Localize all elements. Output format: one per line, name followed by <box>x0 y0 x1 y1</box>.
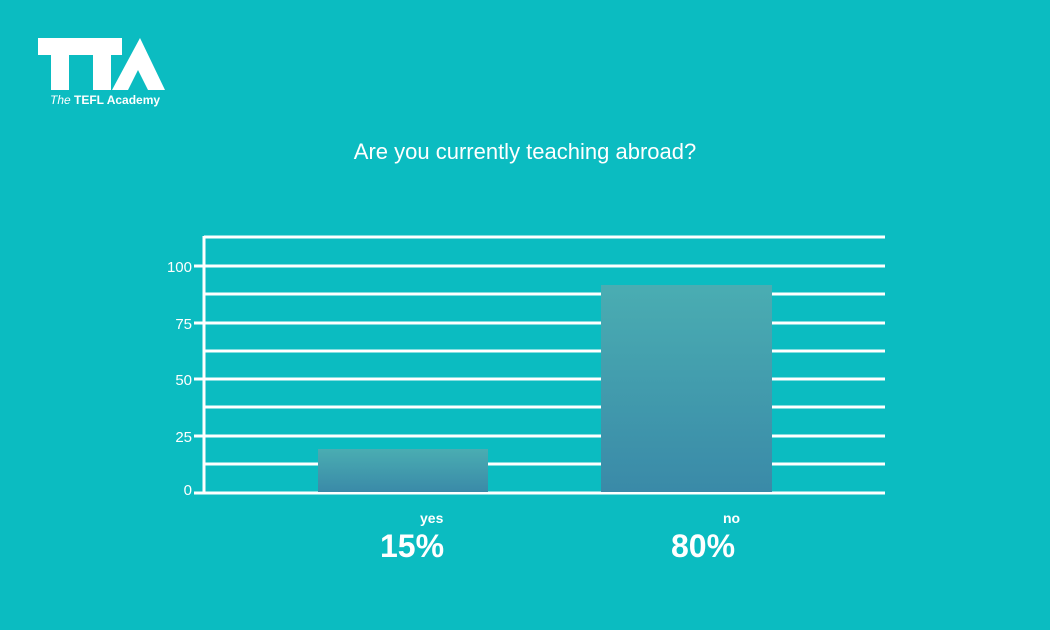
bar: no <box>601 285 772 492</box>
label: yes 15%: 15% <box>380 528 444 564</box>
title: Are you currently teaching abroad? <box>354 139 696 164</box>
bar chart: 0 <box>184 482 192 499</box>
logo: The TEFL Academy <box>50 93 160 107</box>
label: no 80%: 80% <box>671 528 735 564</box>
bar chart: 50 <box>175 372 192 389</box>
label: yes 15% <box>380 510 444 564</box>
bar chart <box>167 236 885 564</box>
label: no 80% <box>671 510 740 564</box>
bar: yes <box>318 449 488 492</box>
bar chart: 25 <box>175 429 192 446</box>
bar chart: 75 <box>175 316 192 333</box>
logo <box>38 38 165 107</box>
label: no 80%: no <box>723 510 740 526</box>
label: yes 15%: yes <box>420 510 443 526</box>
bar chart: 100 <box>167 259 192 276</box>
